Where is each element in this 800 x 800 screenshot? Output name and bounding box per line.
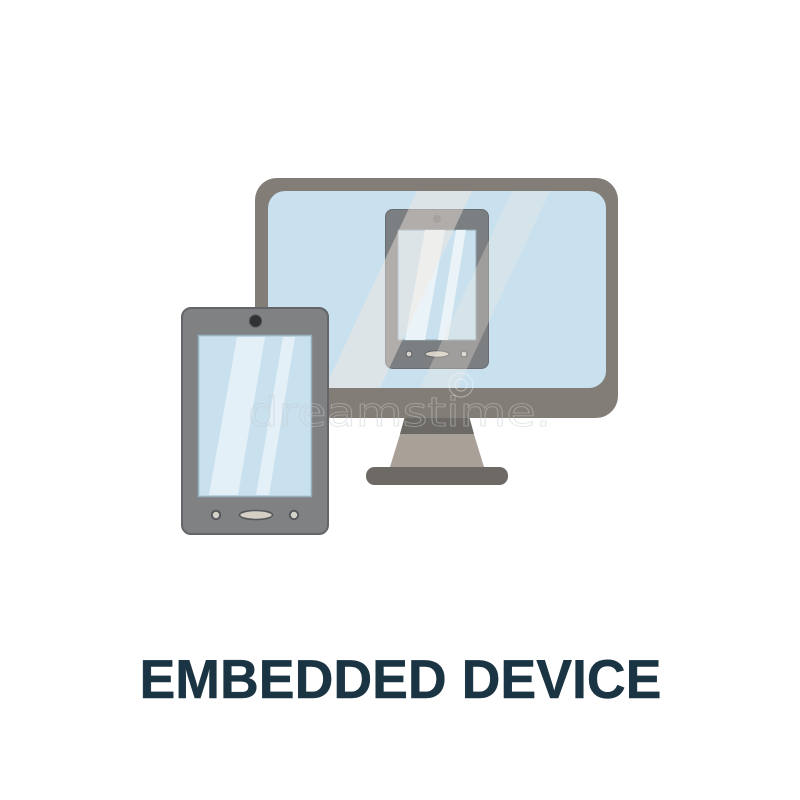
small tablet on screen (386, 210, 488, 368)
monitor screen (268, 191, 606, 388)
monitor glare narrow (420, 191, 550, 388)
tablet left button (212, 511, 220, 519)
monitor glare wide (325, 191, 472, 388)
monitor neck (390, 418, 484, 467)
icon: desktop monitor (255, 178, 618, 485)
tablet body (182, 308, 328, 534)
small tablet body (386, 210, 488, 368)
small tablet left button (406, 351, 412, 357)
tablet right button (290, 511, 298, 519)
monitor base (366, 467, 508, 485)
watermark spiral (449, 373, 473, 397)
tablet camera (250, 315, 262, 327)
watermark (248, 373, 551, 436)
small tablet home button (425, 351, 449, 357)
tablet glare wide (209, 337, 265, 495)
tablet home button (240, 510, 272, 520)
tablet glare narrow (256, 337, 295, 495)
small tablet screen glare narrow (438, 230, 466, 340)
small tablet screen glare (405, 230, 445, 340)
tablet screen (198, 336, 312, 496)
watermark text: dreamstime. (248, 390, 551, 436)
small tablet right button (461, 351, 467, 357)
icon: tablet (182, 308, 328, 534)
small tablet camera (433, 215, 441, 223)
title: EMBEDDED DEVICE (140, 649, 662, 710)
small tablet screen (398, 230, 476, 340)
neck shadow (400, 416, 474, 434)
monitor frame (255, 178, 618, 418)
